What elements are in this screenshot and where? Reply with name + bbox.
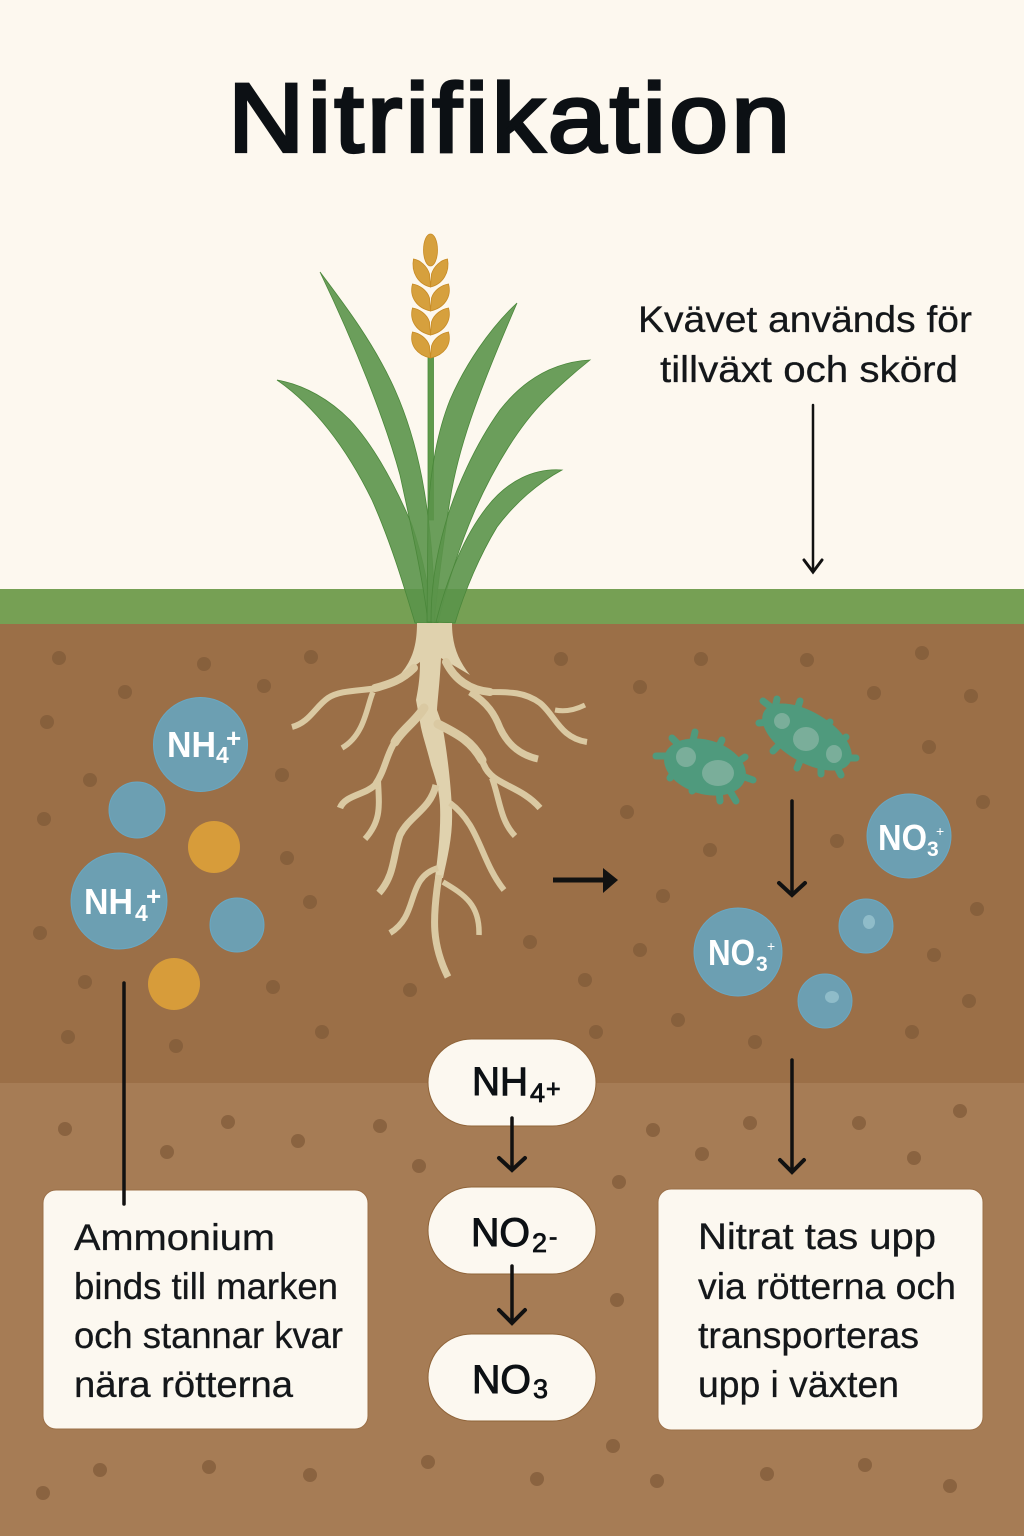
NH4 ion top: NH — [167, 724, 216, 765]
card: nitrate: via rötterna och — [698, 1266, 956, 1307]
NO3 ion lower — [694, 908, 782, 996]
plant with wheat ear — [277, 234, 590, 623]
arrow: NH4+ to NO2- — [499, 1118, 525, 1170]
label: use for growth and harvest: tillväxt och skörd — [660, 349, 958, 390]
card: nitrate: Nitrat tas upp — [698, 1216, 936, 1257]
pill: NO2-: 2 — [532, 1228, 547, 1258]
arrow: NO2- to NO3 — [499, 1266, 525, 1323]
nitrate particles — [694, 794, 951, 1028]
arrow: bacteria to nitrate — [779, 801, 805, 895]
pill: NH4+ — [428, 1039, 596, 1126]
NH4 ion top: + — [226, 723, 241, 753]
NH4 ion top: 4 — [216, 742, 229, 768]
NH4 ion bottom — [71, 853, 167, 949]
NO3 ion lower: 3 — [756, 953, 768, 976]
card: nitrate: transporteras — [698, 1315, 919, 1356]
pill: NO2-: NO — [471, 1211, 530, 1255]
leaves — [277, 272, 590, 623]
label: use for growth and harvest: Kvävet används för — [638, 299, 972, 340]
arrow: down to soil surface — [804, 405, 822, 572]
NO3 ion upper: NO — [878, 817, 927, 858]
NH4 ion bottom: 4 — [135, 900, 148, 926]
title: Nitrifikation — [228, 64, 793, 173]
pill: NO2-: - — [549, 1223, 557, 1251]
pill: NH4+: 4 — [530, 1078, 545, 1108]
arrow: roots to nitrate zone — [553, 868, 618, 893]
pill: NO3 — [428, 1334, 596, 1421]
card: ammonium: binds till marken — [74, 1266, 338, 1307]
NO3 ion lower: NO — [708, 932, 755, 973]
bacterium right — [751, 690, 863, 784]
card: nitrate — [658, 1189, 983, 1430]
card: ammonium — [43, 1190, 368, 1429]
pill: NO2- — [428, 1187, 596, 1274]
card: ammonium: och stannar kvar — [74, 1315, 343, 1356]
ammonium particles — [71, 698, 264, 1010]
NO3 ion lower: + — [767, 938, 775, 954]
NO3 ion upper — [867, 794, 951, 878]
NO3 ion upper: + — [936, 823, 944, 839]
NH4 ion top — [154, 698, 248, 792]
grass band — [0, 589, 1024, 624]
NO3 ion upper: 3 — [927, 838, 939, 861]
bacterium left — [656, 729, 753, 805]
card: ammonium: nära rötterna — [74, 1364, 293, 1405]
card: ammonium: Ammonium — [74, 1217, 275, 1258]
stem — [428, 355, 434, 520]
label: use for growth and harvest — [638, 299, 972, 390]
soil speckles — [33, 646, 990, 1500]
pill: NO3: NO — [472, 1358, 531, 1402]
pill: NO3: 3 — [533, 1374, 548, 1404]
roots — [292, 623, 587, 977]
NH4 ion bottom: NH — [84, 881, 133, 922]
card: nitrate: upp i växten — [698, 1364, 899, 1405]
pill: NH4+: + — [546, 1075, 561, 1103]
arrow: nitrate to card — [780, 1060, 804, 1172]
pill: NH4+: NH — [472, 1060, 528, 1104]
wheat ear — [412, 234, 449, 358]
NH4 ion bottom: + — [146, 881, 161, 911]
connector line from ammonium to card — [122, 983, 126, 1204]
